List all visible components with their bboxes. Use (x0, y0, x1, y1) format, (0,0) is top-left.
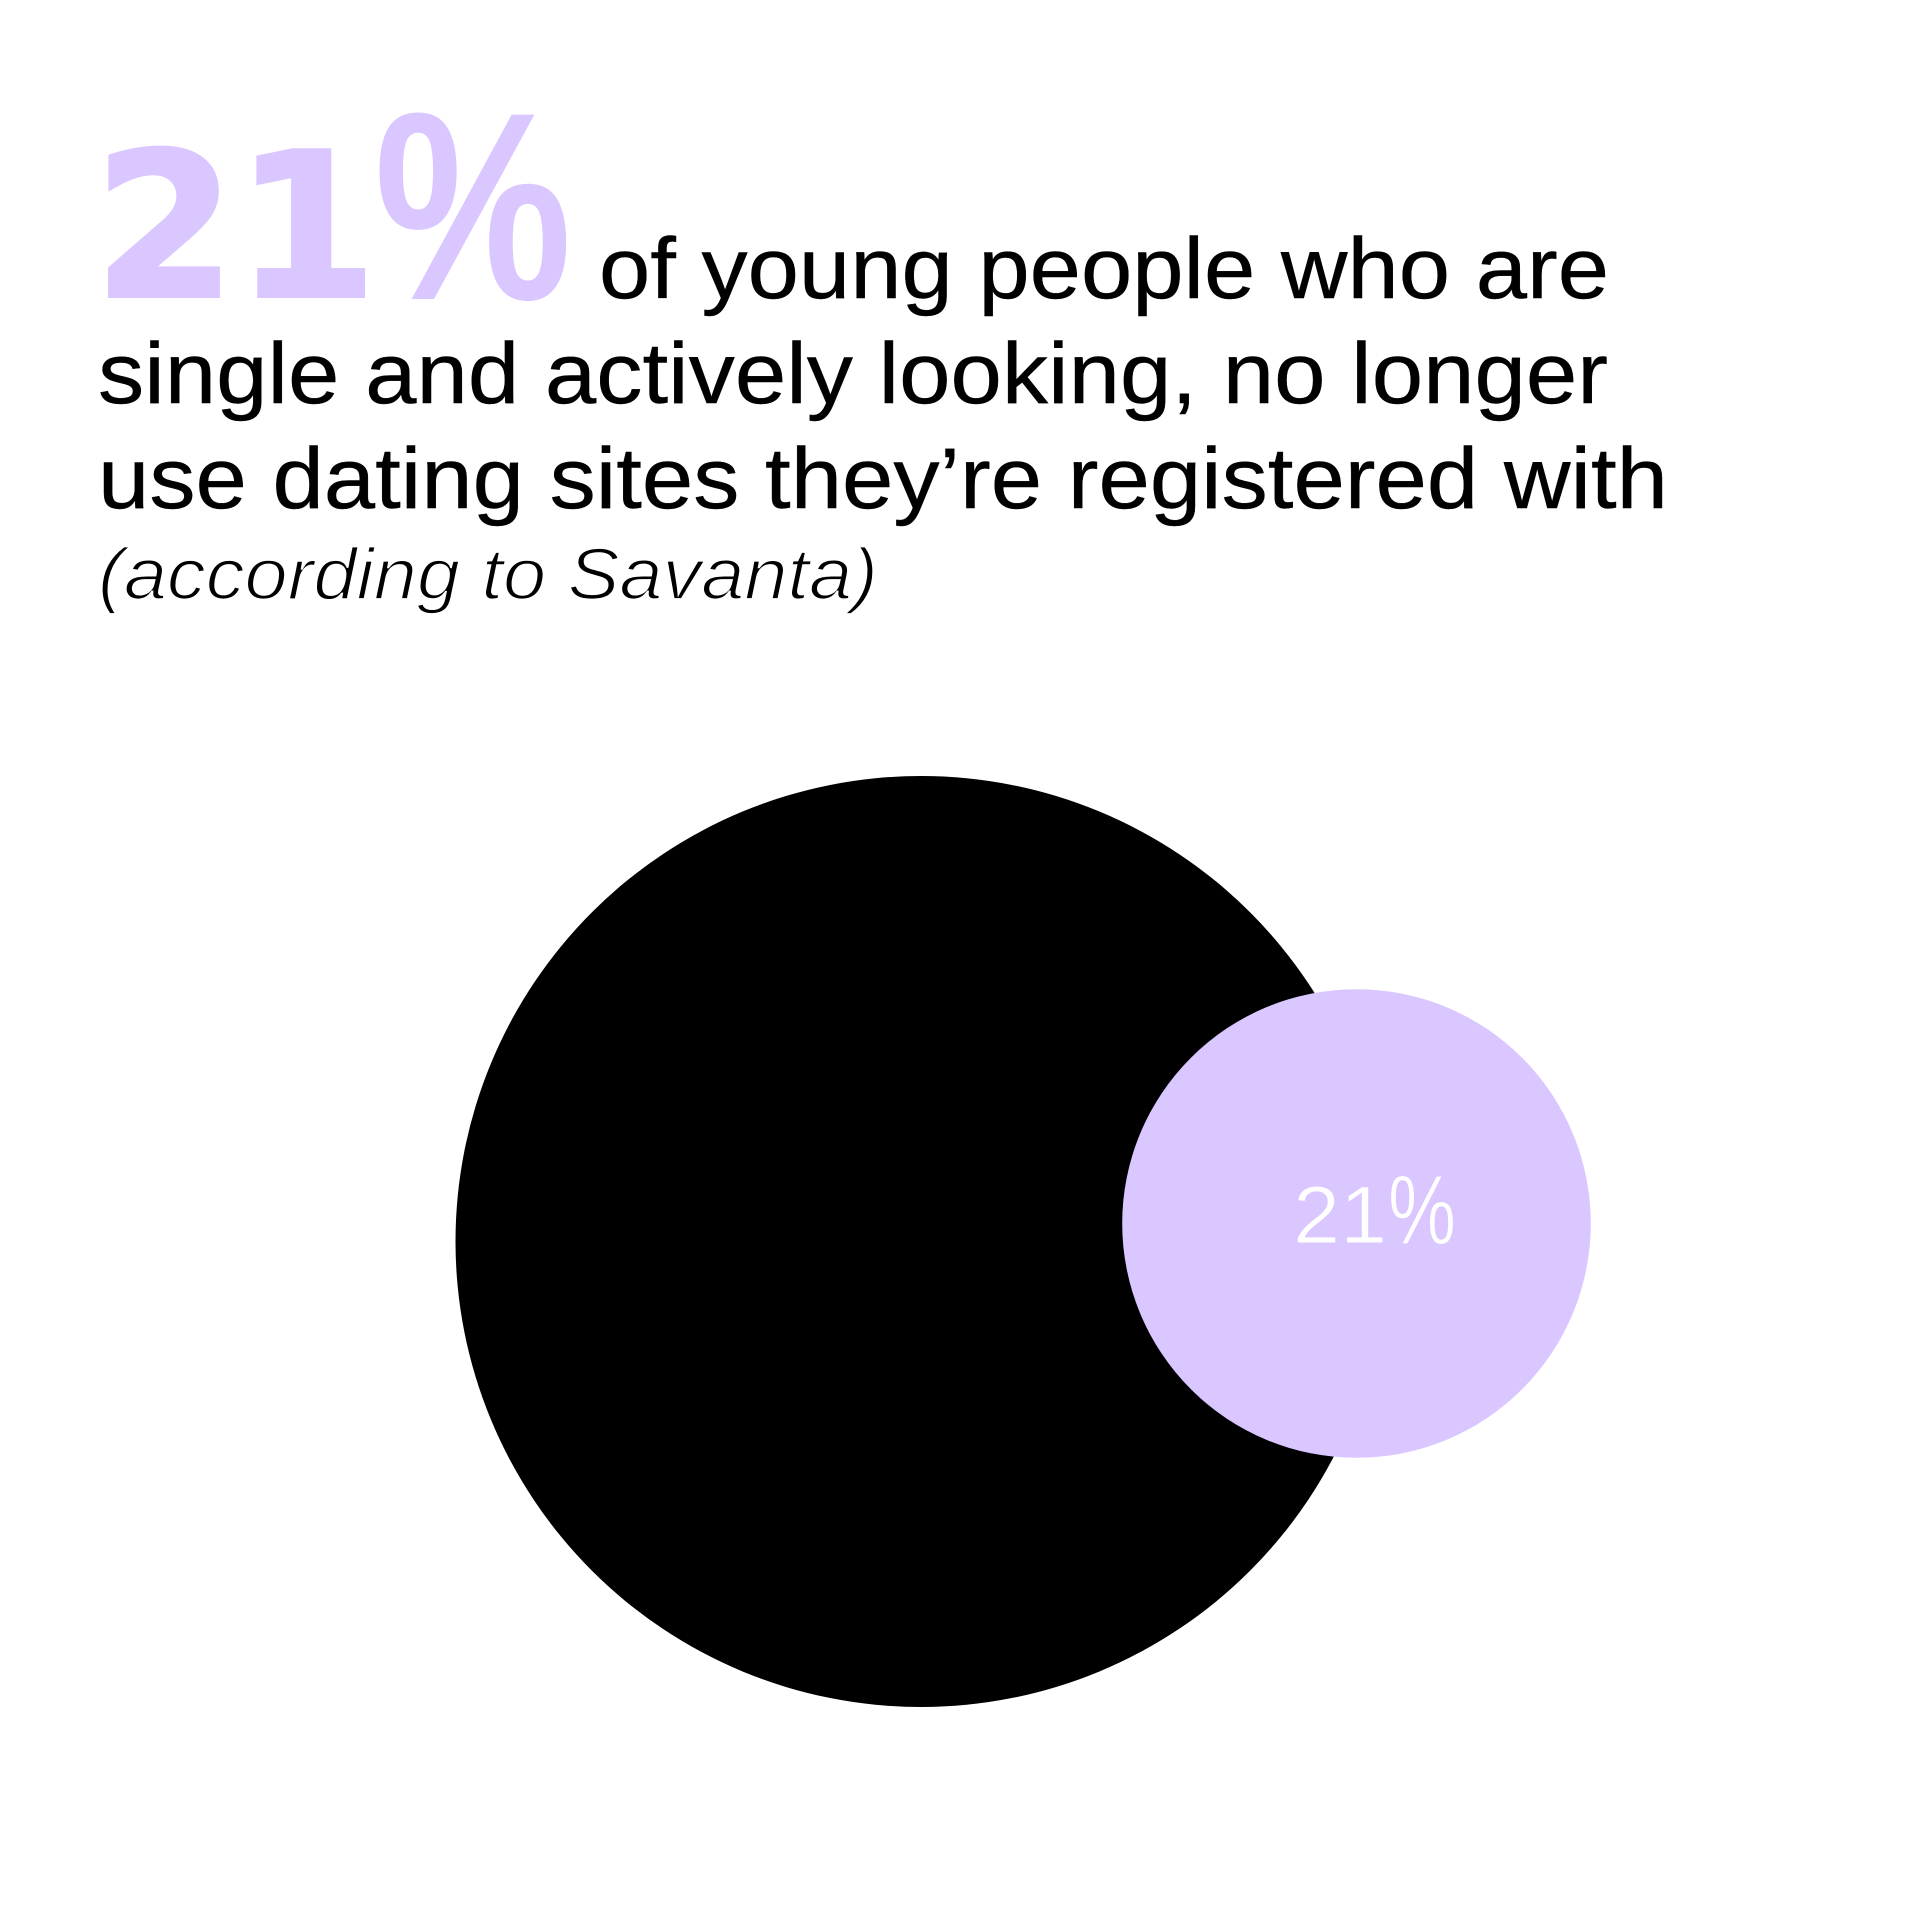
headline statistic: 21%: 21 (94, 111, 377, 344)
circle label: 21% (1293, 1155, 1456, 1265)
headline text: of young people who are (599, 221, 1609, 317)
headline text (98, 221, 1668, 527)
headline statistic: 21% (94, 56, 572, 356)
circle: 21% share (1122, 989, 1591, 1458)
headline text: use dating sites they’re registered with (98, 431, 1668, 527)
headline statistic: 21%: % (374, 56, 572, 356)
circle label: 21%: % (1388, 1155, 1456, 1265)
circle label: 21%: 21 (1293, 1170, 1387, 1261)
headline text: single and actively looking, no longer (98, 326, 1608, 422)
proportional circle chart (456, 776, 1591, 1707)
circle: whole 100% (456, 776, 1386, 1707)
source note: (according to Savanta) (98, 535, 878, 615)
